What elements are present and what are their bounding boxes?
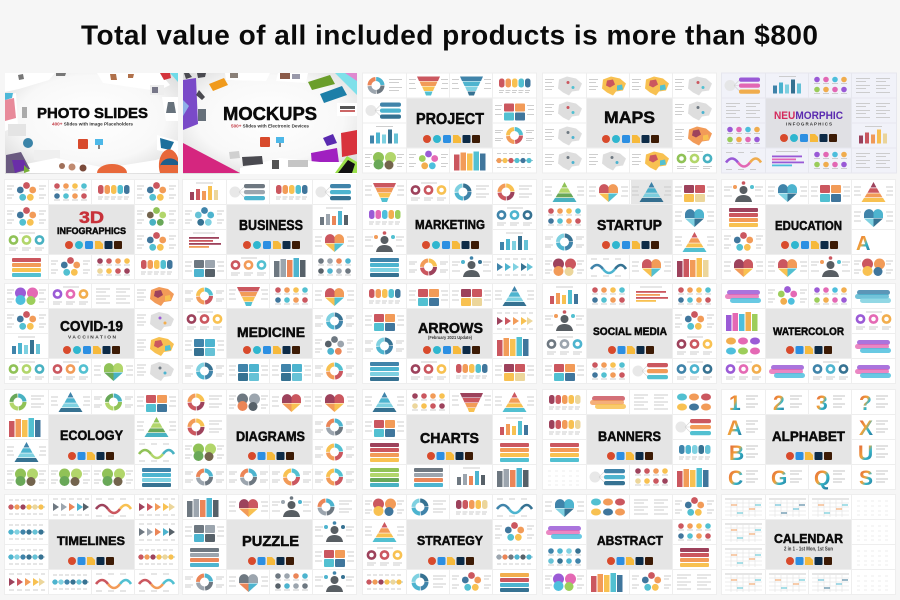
heading: MAPS (604, 108, 655, 127)
slide thumbnails (362, 72, 537, 174)
slide thumbnails (721, 283, 896, 384)
heading: NEUMORPHIC (774, 110, 843, 122)
panel: photo slides (5, 73, 178, 174)
slide thumbnails (542, 283, 717, 384)
panel: puzzle (182, 494, 357, 595)
slide thumbnails (182, 179, 357, 280)
icons: apps (243, 346, 300, 354)
icons: apps (780, 134, 837, 142)
slide thumbnails: 2 (773, 392, 785, 415)
heading: 3D (79, 208, 104, 227)
subtitle: photo slides: 400+ Slides with Image Placeholders (52, 122, 134, 126)
slide thumbnails (362, 494, 537, 595)
slide thumbnails (182, 283, 357, 384)
icons: apps (243, 241, 300, 249)
panel: timelines (4, 494, 179, 595)
heading: CHARTS (420, 430, 479, 447)
heading: mockups: MOCKUPS (223, 104, 317, 124)
icons: apps (786, 452, 832, 460)
heading: ALPHABET (772, 428, 845, 444)
icons: apps (608, 346, 654, 354)
panel: strategy (362, 494, 537, 595)
subtitle: (February 2021 Update) (428, 335, 472, 340)
heading: PROJECT (416, 111, 484, 128)
slide thumbnails (362, 389, 537, 490)
slide thumbnails (542, 494, 717, 595)
heading: COVID-19 (60, 318, 123, 335)
slide thumbnails (721, 389, 896, 490)
slide thumbnails: 1 (729, 392, 741, 415)
icons: apps (248, 452, 294, 460)
icons: apps (428, 557, 474, 565)
icons: apps (423, 346, 480, 354)
slide thumbnails (4, 389, 179, 490)
panel: charts (362, 389, 537, 490)
slide thumbnails: G (771, 467, 787, 490)
panel: business (182, 179, 357, 280)
heading: STARTUP (597, 217, 662, 234)
panel: arrows (362, 283, 537, 384)
panel: alphabet (721, 389, 896, 490)
panel: maps (542, 72, 717, 174)
subtitle heading: INFOGRAPHICS (57, 226, 126, 237)
slide thumbnails: A (856, 233, 870, 255)
heading: DIAGRAMS (236, 429, 305, 444)
slide thumbnails (542, 179, 717, 280)
icons: apps (781, 241, 838, 249)
icons: apps (786, 557, 832, 565)
slide thumbnails: S (859, 467, 873, 490)
heading: photo slides: PHOTO SLIDES (37, 105, 148, 122)
icons: apps (607, 452, 653, 460)
icons: apps (63, 346, 120, 354)
heading: SOCIAL MEDIA (593, 326, 667, 338)
slide thumbnails (721, 494, 896, 595)
panel: social media (542, 283, 717, 384)
heading: ARROWS (418, 320, 483, 337)
slide thumbnails: B (729, 442, 744, 465)
icons: apps (427, 452, 473, 460)
heading: MARKETING (415, 217, 485, 232)
title: Total value of all included products is more than $800 (81, 20, 818, 50)
subtitle: 2 in 1 - 1st Mon, 1st Sun (784, 546, 833, 552)
icons: apps (602, 135, 659, 143)
slide thumbnails (542, 389, 717, 490)
panel: marketing (362, 179, 537, 280)
slide thumbnails (721, 72, 897, 174)
panel: ecology (4, 389, 179, 490)
panel: project (362, 72, 537, 174)
icons: apps (602, 241, 659, 249)
heading: BANNERS (598, 428, 661, 444)
slide thumbnails (182, 494, 357, 595)
slide thumbnails: ? (859, 392, 872, 415)
panel: diagrams (182, 389, 357, 490)
heading: EDUCATION (775, 218, 842, 233)
icons: apps (786, 346, 832, 354)
panel: education (721, 179, 896, 280)
panel: 3D infographics (4, 179, 179, 280)
slide thumbnails (4, 283, 179, 384)
icons: apps (65, 241, 122, 249)
slide thumbnails (4, 179, 179, 280)
heading: MEDICINE (237, 324, 305, 340)
heading: STRATEGY (417, 533, 483, 548)
heading: PUZZLE (242, 533, 299, 550)
icons: apps (68, 452, 114, 460)
slide thumbnails: A (727, 417, 742, 440)
panel: banners (542, 389, 717, 490)
heading: WATERCOLOR (773, 326, 844, 338)
icons: apps (68, 557, 114, 565)
slide thumbnails (362, 179, 537, 280)
icons: apps (248, 557, 294, 565)
heading: ABSTRACT (597, 533, 663, 548)
slide thumbnails (4, 494, 179, 595)
subtitle: mockups: 500+ Slides with Electronic Devices (231, 124, 310, 128)
panel: calendar (721, 494, 896, 595)
panel: startup (542, 179, 717, 280)
panel: mockups (183, 73, 357, 174)
subtitle: VACCINATION (68, 334, 117, 340)
slide thumbnails: Q (814, 467, 830, 490)
slide thumbnails (362, 283, 537, 384)
panel: watercolor (721, 283, 896, 384)
heading: CALENDAR (774, 531, 844, 546)
panel: neumorphic (721, 72, 897, 174)
panel: medicine (182, 283, 357, 384)
icons: powerpoint and keynote (260, 137, 284, 147)
icons: apps (607, 557, 653, 565)
slide thumbnails: 3 (816, 392, 828, 415)
icons: apps (423, 135, 480, 143)
icons: powerpoint and keynote (78, 139, 103, 149)
panel: covid-19 (4, 283, 179, 384)
icons: apps (422, 241, 479, 249)
heading: TIMELINES (57, 534, 125, 548)
slide thumbnails: X (859, 417, 873, 440)
heading: BUSINESS (239, 217, 303, 234)
panel: abstract (542, 494, 717, 595)
slide thumbnails: U (858, 442, 873, 465)
slide thumbnails (721, 179, 896, 280)
slide thumbnails (542, 72, 717, 174)
slide thumbnails: C (728, 467, 743, 490)
heading: ECOLOGY (60, 427, 124, 443)
subtitle: INFOGRAPHICS (786, 122, 832, 126)
slide thumbnails (182, 389, 357, 490)
